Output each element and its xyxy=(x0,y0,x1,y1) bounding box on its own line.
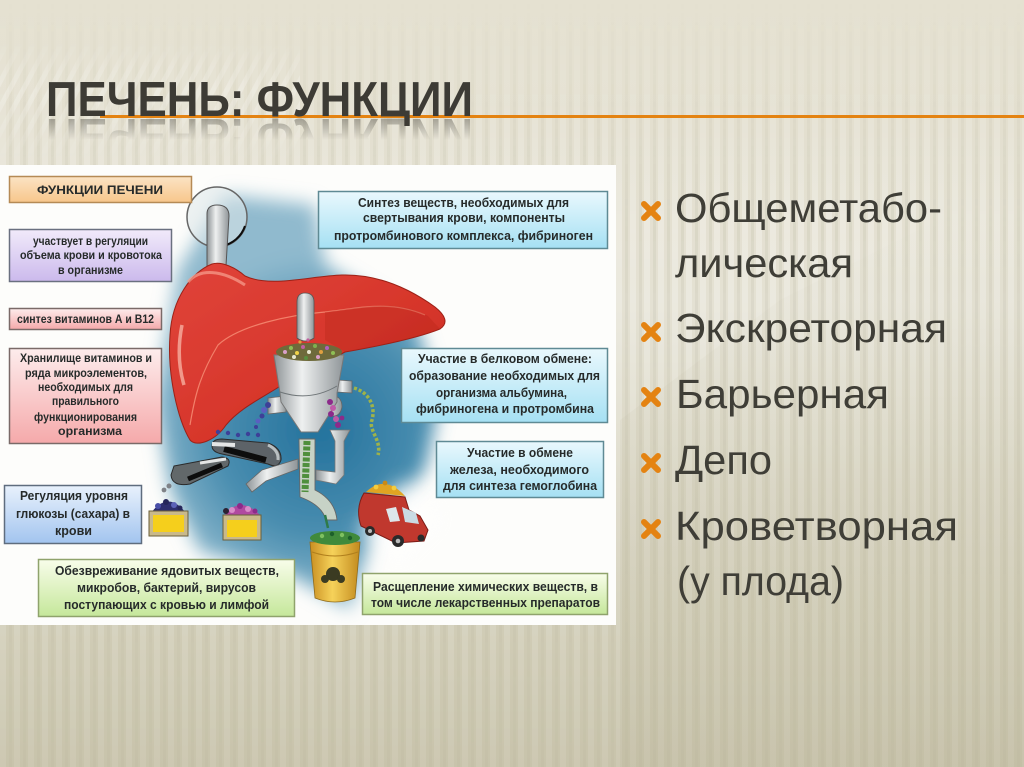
icon: blue bead crate xyxy=(149,484,188,536)
title reflection: ПЕЧЕНЬ: ФУНКЦИИ xyxy=(46,108,473,162)
label: detoxification xyxy=(38,560,294,616)
label: detoxification: микробов, бактерий, вирусов xyxy=(77,580,256,595)
label: vitamin storage: организма xyxy=(58,424,122,438)
beads: falling blue chain xyxy=(216,402,271,437)
label: coagulation synthesis: свертывания крови, компоненты xyxy=(363,210,565,225)
icon: wall faucet xyxy=(187,187,247,266)
label: glucose regulation xyxy=(4,486,142,544)
item: depot: Депо xyxy=(675,437,772,483)
label: functions heading xyxy=(10,176,192,202)
beads: falling magenta chain xyxy=(327,399,344,428)
item: hematopoietic: (у плода) xyxy=(677,558,844,604)
label: iron metabolism xyxy=(436,442,604,498)
icon: small funnel and side pipe xyxy=(316,430,350,484)
bullet list xyxy=(644,185,958,604)
label: protein metabolism: организма альбумина, xyxy=(436,385,567,400)
label: coagulation synthesis xyxy=(318,192,608,248)
title rule xyxy=(100,115,1024,118)
label: protein metabolism xyxy=(402,348,608,422)
icon: conveyor lower xyxy=(171,457,229,485)
label: blood volume regulation: в организме xyxy=(58,263,123,277)
label: vitamin storage: правильного xyxy=(52,394,119,408)
item: hematopoietic: Кроветворная xyxy=(675,503,958,549)
label: detoxification: Обезвреживание ядовитых веществ, xyxy=(55,563,279,578)
beads: falling green chain xyxy=(354,388,379,455)
label: vitamin storage: Хранилище витаминов и xyxy=(20,351,152,365)
label: vitamin storage: необходимых для xyxy=(38,380,133,394)
label: protein metabolism: Участие в белковом обмене: xyxy=(418,351,592,366)
label: protein metabolism: образование необходимых для xyxy=(409,368,600,383)
label: vitamin storage: ряда микроэлементов, xyxy=(25,366,147,380)
icon: funnel xyxy=(268,343,352,432)
icon: red truck xyxy=(359,481,428,547)
label: vitamin storage: функционирования xyxy=(34,410,137,424)
icon: nozzle pipe xyxy=(246,459,298,492)
label: coagulation synthesis: протромбинового комплекса, фибриноген xyxy=(334,228,593,243)
label: glucose regulation: крови xyxy=(55,523,92,538)
illustration: liver xyxy=(170,263,445,443)
label: protein metabolism: фибриногена и протромбина xyxy=(416,401,595,416)
label: coagulation synthesis: Синтез веществ, необходимых для xyxy=(358,195,569,210)
title: ПЕЧЕНЬ: ФУНКЦИИ xyxy=(46,73,473,127)
icon: inner tube xyxy=(297,293,314,341)
label: blood volume regulation: участвует в регуляции xyxy=(33,234,148,248)
item: general metabolic: лическая xyxy=(675,240,853,286)
item: general metabolic: Общеметабо- xyxy=(675,185,942,231)
label: iron metabolism: железа, необходимого xyxy=(449,462,589,477)
truck shadow patch xyxy=(355,480,440,560)
panel: liver functions diagram xyxy=(0,165,616,625)
label: chemical breakdown xyxy=(362,574,608,614)
label: blood volume regulation: объема крови и кровотока xyxy=(20,248,162,262)
label: iron metabolism: для синтеза гемоглобина xyxy=(443,478,598,493)
label: vitamin storage xyxy=(10,348,162,444)
item: excretory: Экскреторная xyxy=(675,305,947,351)
item: general metabolic xyxy=(644,185,942,286)
label: glucose regulation: глюкозы (сахара) в xyxy=(16,506,130,521)
label: glucose regulation: Регуляция уровня xyxy=(20,488,128,503)
item: hematopoietic xyxy=(644,503,958,604)
label: blood volume regulation xyxy=(10,230,172,282)
label: functions heading: ФУНКЦИИ ПЕЧЕНИ xyxy=(37,183,163,197)
icon: green drain pipe xyxy=(299,439,337,528)
label: vitamin synthesis xyxy=(10,308,162,330)
beads on funnel xyxy=(283,338,335,360)
label: detoxification: поступающих с кровью и лимфой xyxy=(64,597,269,612)
label: chemical breakdown: том числе лекарственных препаратов xyxy=(371,595,600,610)
icon: magenta bead crate xyxy=(223,503,261,540)
icon: conveyor upper xyxy=(212,439,281,466)
icon: toxic waste barrel xyxy=(310,531,360,602)
label: iron metabolism: Участие в обмене xyxy=(467,445,573,460)
label: vitamin synthesis: синтез витаминов А и В12 xyxy=(17,312,154,326)
item: barrier: Барьерная xyxy=(676,371,889,417)
blue backdrop xyxy=(155,195,440,610)
label: chemical breakdown: Расщепление химических веществ, в xyxy=(373,579,598,594)
